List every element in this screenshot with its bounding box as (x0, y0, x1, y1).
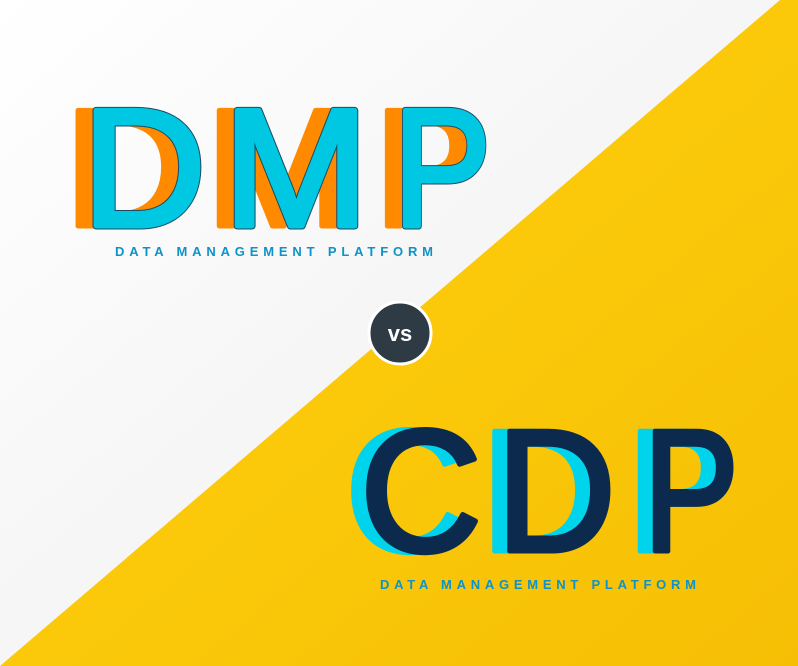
cyan front letters outline: D (82, 74, 206, 262)
orange shadow letters: P (375, 74, 473, 262)
cyan front letters outline (82, 74, 491, 262)
cyan front letters: M (223, 74, 369, 262)
navy front letters (360, 393, 739, 588)
cyan front letters (82, 74, 491, 262)
orange shadow letters: D (64, 74, 188, 262)
cyan front letters: D (82, 74, 206, 262)
cyan shadow letters: C (345, 393, 467, 588)
navy front letters: P (643, 393, 739, 588)
cyan front letters outline: M (223, 74, 369, 262)
cyan shadow letters: P (628, 393, 724, 588)
navy front letters: D (496, 393, 616, 588)
navy front letters: C (360, 393, 482, 588)
badge: vs (369, 302, 431, 364)
heading: DMP (64, 74, 491, 262)
cyan front letters outline: P (393, 74, 491, 262)
orange shadow letters: M (205, 74, 351, 262)
orange shadow letters (64, 74, 473, 262)
cyan shadow letters: D (481, 393, 601, 588)
badge: vs: vs (388, 321, 412, 346)
cyan shadow letters (345, 393, 724, 588)
heading: CDP (345, 393, 739, 588)
cyan front letters: P (393, 74, 491, 262)
subtitle: CDP: DATA MANAGEMENT PLATFORM (380, 577, 696, 592)
subtitle: DMP: DATA MANAGEMENT PLATFORM (115, 244, 433, 259)
